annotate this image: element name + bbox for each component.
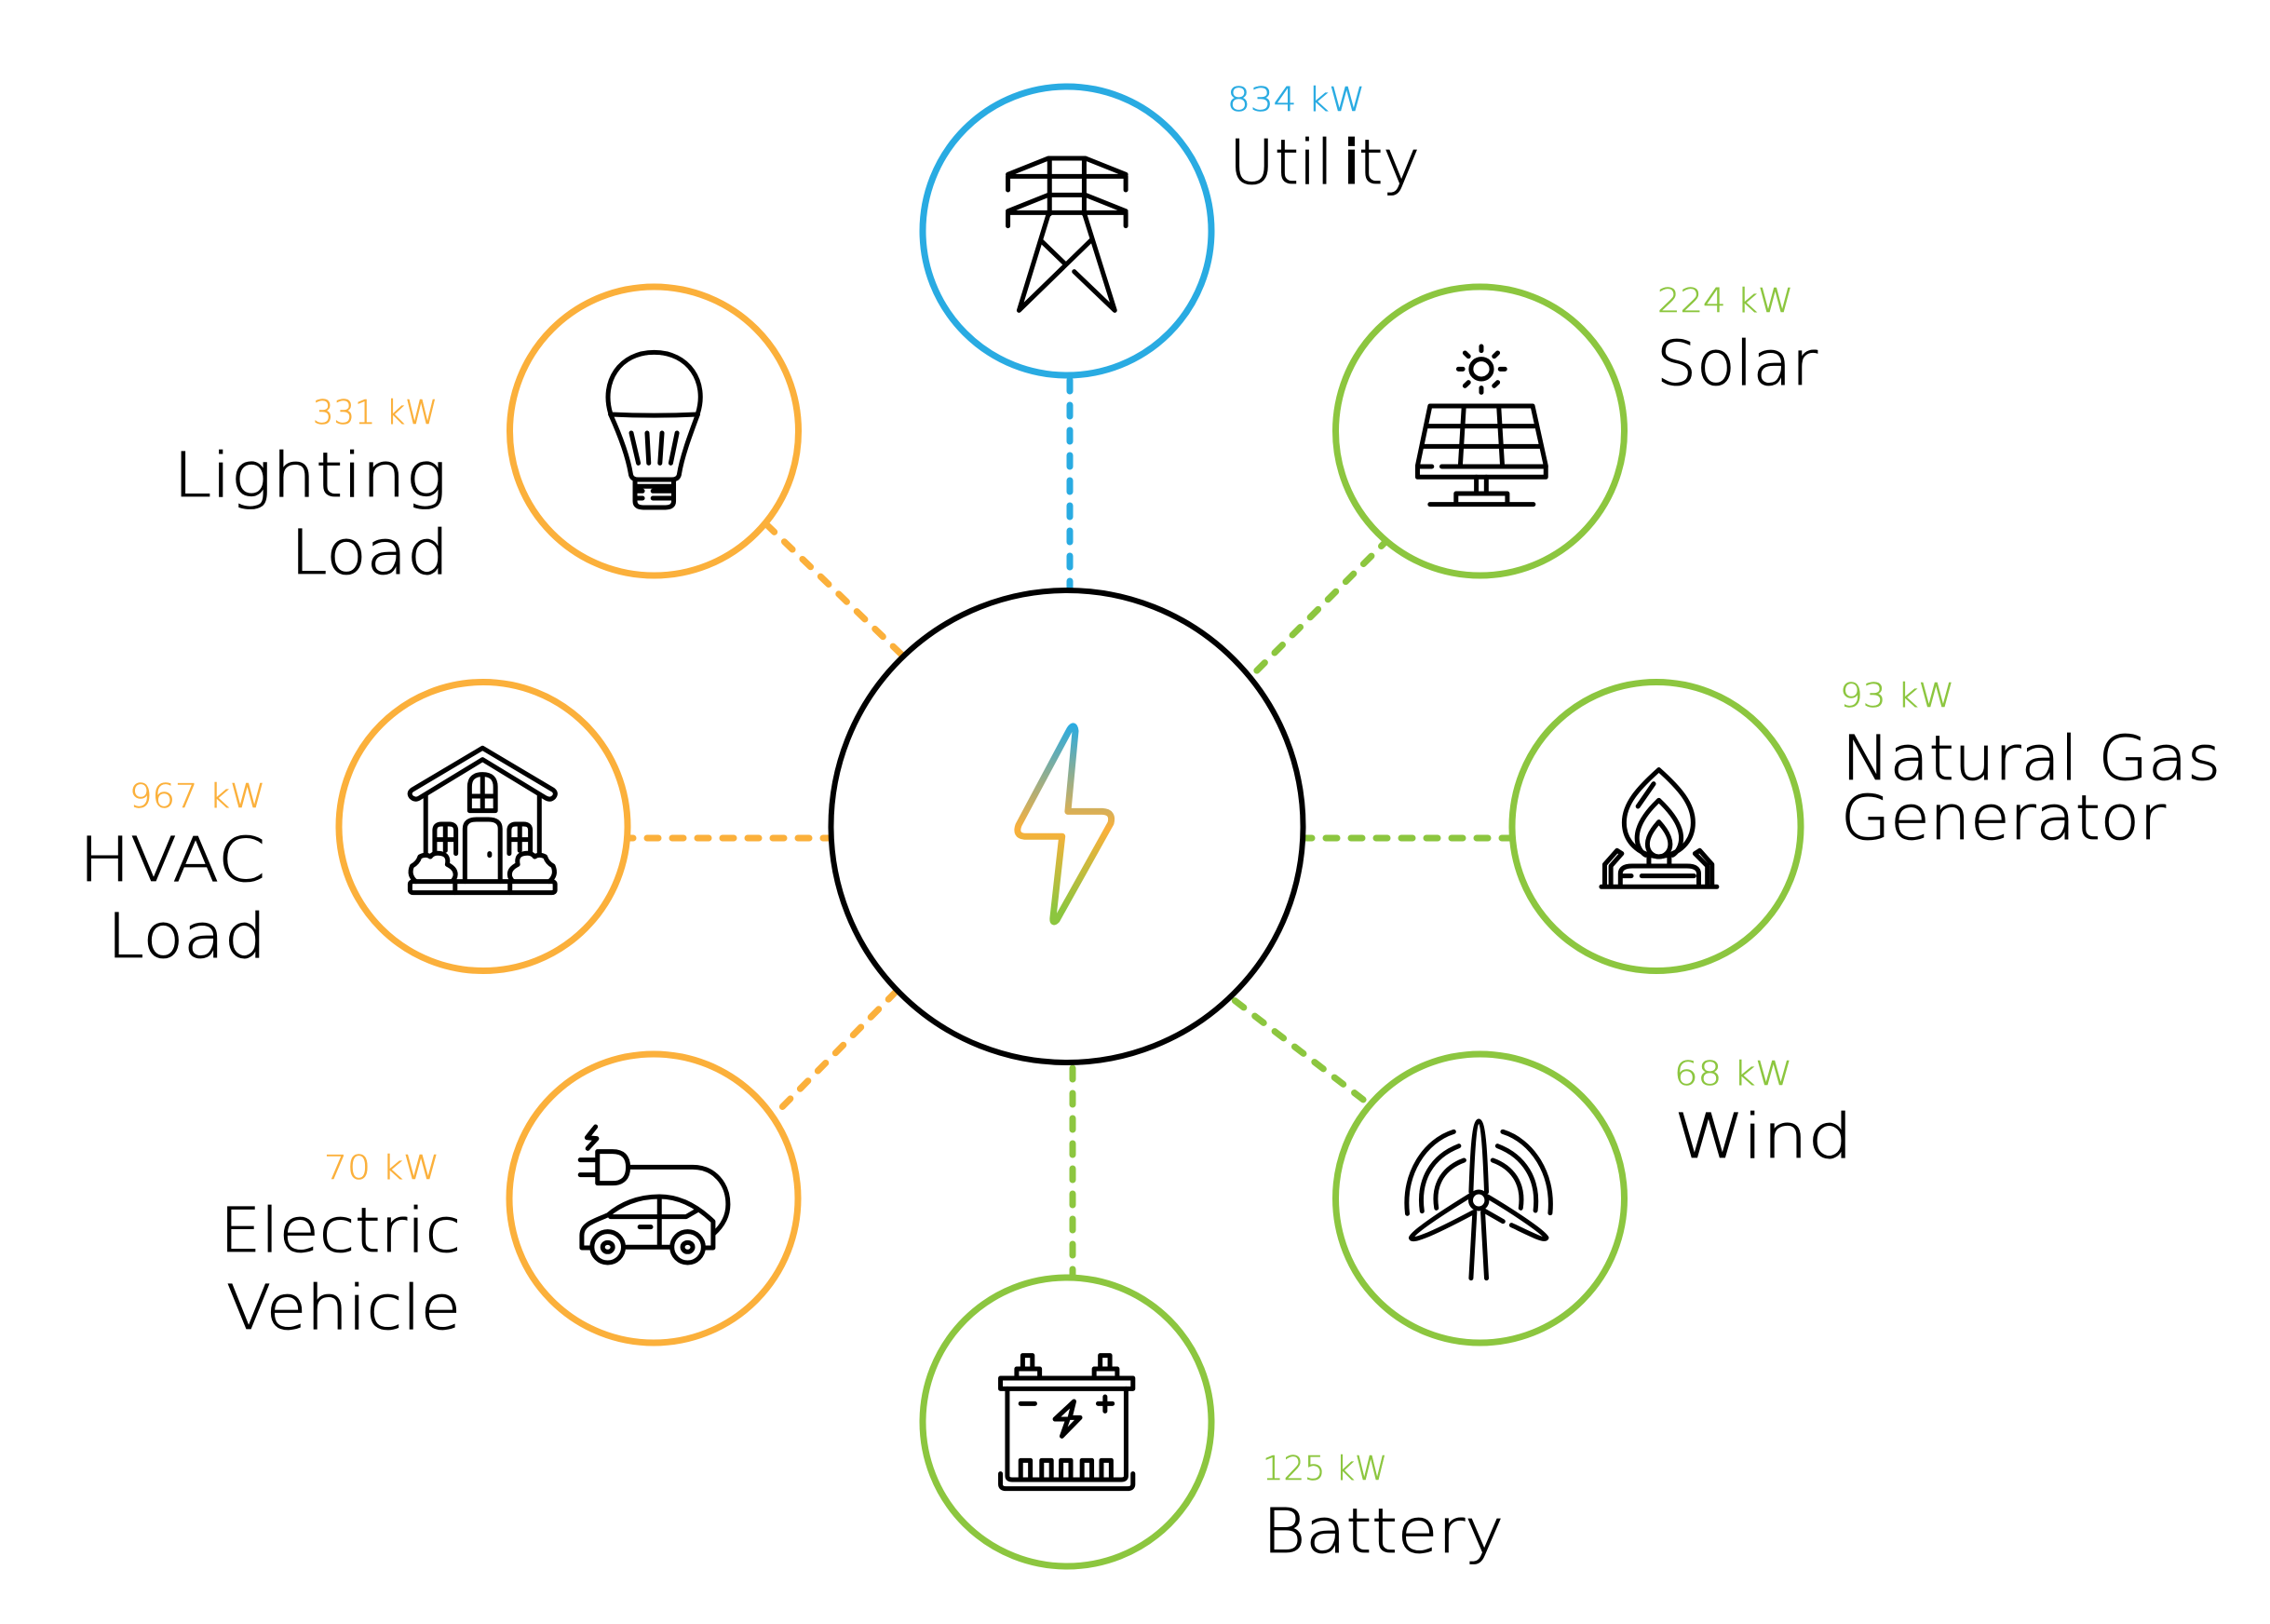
label: Wind: Wind bbox=[1674, 1101, 1853, 1172]
label: HVAC: HVAC bbox=[79, 824, 265, 896]
label: Utility: Util bbox=[1229, 127, 1333, 198]
label: Natural Gas: Natural Gas bbox=[1842, 723, 2221, 794]
node: battery bbox=[923, 1278, 1504, 1567]
label: Load: Load bbox=[291, 517, 449, 589]
value: 70 kW: 70 kW bbox=[324, 1149, 439, 1187]
icon: solar panel bbox=[1417, 346, 1546, 505]
connector: battery bbox=[1069, 1052, 1076, 1280]
label: Electric: Electric bbox=[220, 1195, 461, 1266]
connector: solar bbox=[1238, 538, 1389, 689]
node: lighting load bbox=[173, 287, 799, 589]
icon: battery bbox=[1001, 1356, 1133, 1489]
icon: electric car bbox=[580, 1127, 728, 1263]
value: 125 kW: 125 kW bbox=[1263, 1450, 1387, 1488]
label: Battery: Battery bbox=[1263, 1495, 1504, 1567]
value: 93 kW: 93 kW bbox=[1840, 677, 1954, 715]
node: utility bbox=[923, 81, 1420, 375]
icon: wind turbine bbox=[1407, 1121, 1550, 1279]
value: 834 kW: 834 kW bbox=[1227, 81, 1365, 119]
connector: lighting bbox=[766, 524, 917, 670]
connector: wind bbox=[1220, 989, 1371, 1105]
value: 331 kW: 331 kW bbox=[313, 394, 438, 432]
label: Solar: Solar bbox=[1656, 328, 1818, 399]
label: Lighting: Lighting bbox=[173, 440, 447, 511]
label: Utility: ty bbox=[1358, 127, 1420, 198]
label: Generator: Generator bbox=[1841, 782, 2167, 854]
value: 967 kW: 967 kW bbox=[129, 778, 265, 816]
icon: transmission tower bbox=[1008, 158, 1126, 310]
connector: electric vehicle bbox=[775, 980, 908, 1115]
central hub bbox=[831, 590, 1304, 1062]
connector: hvac bbox=[622, 834, 838, 842]
label: Vehicle: Vehicle bbox=[226, 1272, 461, 1344]
node: solar bbox=[1335, 282, 1818, 575]
connector: natural gas bbox=[1294, 834, 1513, 842]
node: hvac load bbox=[79, 682, 628, 972]
value: 224 kW: 224 kW bbox=[1657, 282, 1793, 320]
icon: house bbox=[410, 748, 555, 893]
icon: gas flame bbox=[1601, 770, 1717, 886]
connector: utility bbox=[1067, 380, 1073, 605]
node: electric vehicle bbox=[220, 1054, 798, 1344]
label: Utility: i bbox=[1345, 127, 1358, 198]
value: 68 kW: 68 kW bbox=[1674, 1055, 1792, 1093]
node: wind bbox=[1335, 1054, 1853, 1343]
node: natural gas generator bbox=[1512, 677, 2221, 970]
icon: lightning bolt bbox=[1018, 726, 1112, 922]
icon: light bulb bbox=[608, 352, 700, 508]
label: Load: Load bbox=[107, 900, 266, 972]
